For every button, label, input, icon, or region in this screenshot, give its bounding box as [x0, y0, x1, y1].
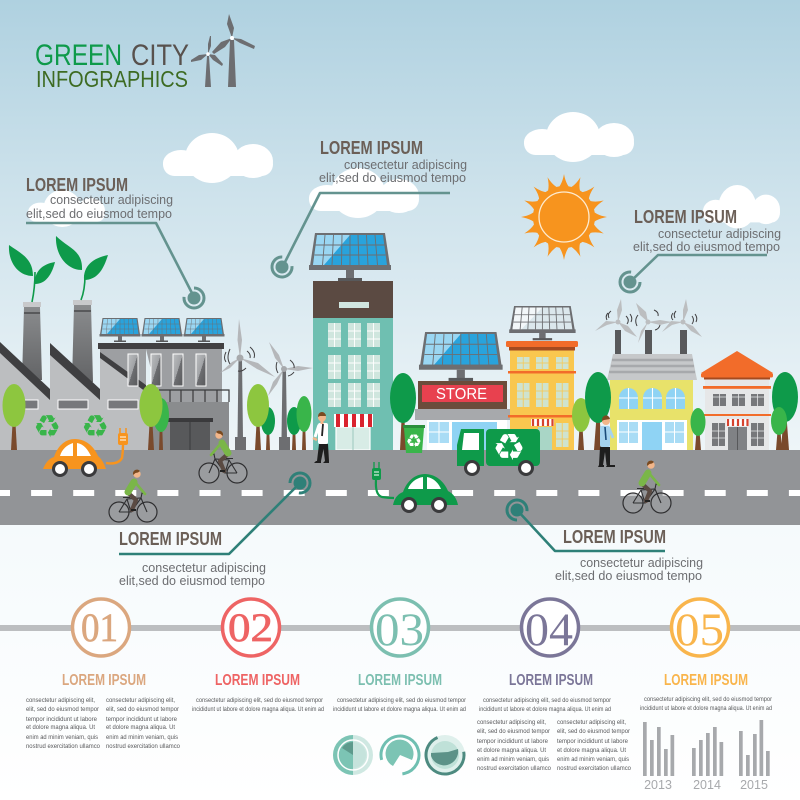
callout: top left: consectetur adipiscing — [50, 193, 173, 207]
step 01 text columns: enim ad minim veniam, quis — [26, 734, 98, 741]
pie 3 — [423, 733, 467, 777]
saw-tooth halls: ♻ — [33, 409, 61, 445]
callout: top centre — [271, 138, 467, 278]
step 04 text columns: consectetur adipiscing elit, — [477, 719, 546, 726]
step 05 — [640, 599, 773, 712]
step 01 text columns: elit, sed do eiusmod tempor — [106, 706, 180, 713]
green-roof turbine building — [595, 299, 702, 450]
orange-roof house — [701, 351, 773, 450]
cyclist: lower right — [623, 461, 671, 513]
bar chart: 2014 — [693, 778, 721, 792]
step 01 text columns: consectetur adipiscing elit, — [26, 697, 95, 704]
road — [0, 450, 800, 525]
callout: road right: elit,sed do eiusmod tempo — [555, 569, 702, 583]
store with solar panel — [415, 332, 510, 450]
step 04 — [477, 599, 631, 772]
mid wind turbines — [220, 319, 313, 450]
step 04 text columns: nostrud exercitation ullamco — [557, 765, 631, 772]
sprouts on chimneys — [9, 236, 108, 302]
step 04 text columns: et dolore magna aliqua. Ut — [557, 747, 626, 754]
rooftop turbines — [595, 299, 702, 354]
step 03: 03 — [375, 604, 424, 656]
person: man in blue shirt — [598, 415, 615, 467]
callout: road right: consectetur adipiscing — [580, 556, 703, 570]
step 01 text columns: elit, sed do eiusmod tempor — [26, 706, 100, 713]
callout: top right — [620, 207, 781, 292]
step 01 text columns: nostrud exercitation ullamco — [106, 743, 180, 750]
cyclist: upper road — [199, 431, 247, 483]
cyclist: lower left — [109, 470, 157, 522]
pie 1 — [333, 735, 373, 775]
green recycling truck: ♻ — [492, 426, 526, 469]
callout: road right: LOREM IPSUM — [563, 527, 666, 547]
callout: top right: elit,sed do eiusmod tempo — [633, 240, 780, 254]
callout: road left: LOREM IPSUM — [119, 529, 222, 549]
step 03: LOREM IPSUM — [358, 672, 442, 689]
step 02: consectetur adipiscing elit, sed do eiusmod tempor — [196, 697, 324, 704]
recycling bin — [403, 425, 425, 453]
step 04 text columns: consectetur adipiscing elit, — [557, 719, 626, 726]
step 04: incididunt ut labore et dolore magna aliqua. Ut enim ad — [479, 706, 611, 713]
step 04: LOREM IPSUM — [509, 672, 593, 689]
step 01 text columns: et dolore magna aliqua. Ut — [106, 724, 175, 731]
step 04 text columns: elit, sed do eiusmod tempor — [557, 728, 631, 735]
step 01 text columns: consectetur adipiscing elit, — [106, 697, 175, 704]
saw-tooth halls: ♻ — [81, 409, 109, 445]
step 02: 02 — [228, 605, 273, 650]
step 05: 05 — [675, 604, 724, 656]
chimneys — [22, 300, 93, 382]
step 04 text columns: elit, sed do eiusmod tempor — [477, 728, 551, 735]
step 03 — [333, 599, 467, 713]
clouds — [28, 112, 780, 228]
lower white section background — [0, 525, 800, 800]
saw-tooth halls — [0, 342, 150, 450]
bar chart: 2015 — [740, 778, 768, 792]
sky background — [0, 0, 800, 450]
step 02: incididunt ut labore et dolore magna aliqua. Ut enim ad — [192, 706, 324, 713]
store sign: STORE — [436, 386, 487, 403]
bar chart — [643, 720, 770, 792]
step 04: 04 — [525, 604, 573, 656]
step 01: 01 — [81, 605, 118, 650]
callout: top centre: consectetur adipiscing — [344, 158, 467, 172]
step 01 text columns — [26, 697, 180, 750]
step 01 text columns: tempor incididunt ut labore — [106, 716, 177, 723]
callout: top left: LOREM IPSUM — [26, 175, 128, 195]
callout: top right: consectetur adipiscing — [658, 227, 781, 241]
tall teal building with solar panel — [309, 233, 393, 450]
step 03: consectetur adipiscing elit, sed do eiusmod tempor — [337, 697, 467, 704]
green recycling truck — [457, 426, 540, 476]
step 04: consectetur adipiscing elit, sed do eiusmod tempor — [483, 697, 612, 704]
step 01 text columns: nostrud exercitation ullamco — [26, 743, 100, 750]
timeline bar — [0, 625, 800, 631]
step 01 — [26, 599, 180, 750]
callout: road right — [507, 500, 703, 583]
gray office with rooftop solar panels — [98, 318, 229, 450]
step 04 text columns: tempor incididunt ut labore — [557, 738, 628, 745]
step 04 text columns: tempor incididunt ut labore — [477, 738, 548, 745]
step 01 text columns: enim ad minim veniam, quis — [106, 734, 178, 741]
callout: road left: consectetur adipiscing — [142, 561, 266, 575]
step 05: incididunt ut labore et dolore magna aliqua. Ut enim ad — [640, 705, 772, 712]
yellow building with silver panel — [506, 306, 578, 450]
title — [35, 39, 189, 92]
step 04 text columns: nostrud exercitation ullamco — [477, 765, 551, 772]
recycling bin: ♻ — [406, 431, 422, 452]
step 02: LOREM IPSUM — [215, 672, 300, 689]
trees — [2, 372, 798, 450]
step 01: LOREM IPSUM — [62, 672, 146, 689]
step 05: LOREM IPSUM — [664, 672, 748, 689]
step 03: incididunt ut labore et dolore magna aliqua. Ut enim ad — [333, 706, 466, 713]
green electric car — [372, 462, 458, 513]
icon: sun — [521, 174, 607, 260]
pie charts — [333, 732, 467, 778]
step 02 — [192, 599, 324, 713]
pie 2 — [377, 732, 423, 778]
step 04 text columns: et dolore magna aliqua. Ut — [477, 747, 546, 754]
callout: road left — [119, 473, 310, 588]
step 01 text columns: tempor incididunt ut labore — [26, 716, 97, 723]
callout: top left — [26, 175, 204, 308]
icon: title wind turbines — [191, 14, 255, 87]
factory — [0, 300, 150, 450]
orange electric car — [43, 428, 128, 477]
title: INFOGRAPHICS — [36, 66, 188, 92]
callout: road left: elit,sed do eiusmod tempo — [119, 574, 265, 588]
step 05: consectetur adipiscing elit, sed do eiusmod tempor — [644, 696, 773, 703]
step 04 text columns: enim ad minim veniam, quis — [477, 756, 549, 763]
title: GREEN — [35, 39, 122, 72]
step 04 text columns: enim ad minim veniam, quis — [557, 756, 629, 763]
bar chart: 2013 — [644, 778, 672, 792]
callout: top centre: LOREM IPSUM — [320, 138, 423, 158]
callout: top centre: elit,sed do eiusmod tempo — [319, 171, 466, 185]
step 04 text columns — [477, 719, 631, 772]
callout: top right: LOREM IPSUM — [634, 207, 737, 227]
step 01 text columns: et dolore magna aliqua. Ut — [26, 724, 95, 731]
person: man in white shirt — [313, 412, 329, 463]
title: CITY — [131, 39, 189, 72]
callout: top left: elit,sed do eiusmod tempo — [26, 207, 172, 221]
